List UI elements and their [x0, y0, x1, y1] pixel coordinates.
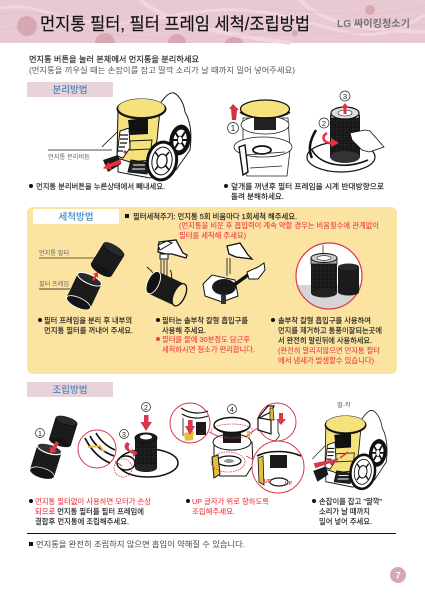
text: separate step two: 덮개를 꺼낸후 필터 프레임을 시계 반대방향으로: [231, 182, 384, 191]
text: cleaning step three: 서 완전히 말린뒤에 사용하세요.: [278, 336, 372, 345]
intro text: [29, 54, 295, 75]
text: assembly step three: 밀어 넣어 주세요.: [319, 517, 372, 526]
footer note: 먼지통을 완전히 조립하지 않으면 흡입이 약해질 수 있습니다.: [36, 539, 245, 549]
title: 먼지통 필터, 필터 프레임 세척/조립방법: [40, 14, 310, 34]
heading: assembly method: [27, 382, 113, 397]
text: cleaning step three: 솔부착 칼형 흡입구를 사용하여: [278, 316, 371, 325]
page number: 7: [395, 570, 401, 582]
illustration: filter twist removal: 3: [343, 92, 347, 101]
page number: [390, 567, 406, 583]
illustration: vacuum with dust bin release: [48, 93, 193, 182]
inset: lid tab detail: [170, 403, 220, 443]
panel: cleaning method: [27, 207, 397, 374]
illustration: dried filter inset: [296, 243, 362, 309]
inset: latch detail: [250, 403, 296, 441]
inset: UP mark detail: UP: [285, 481, 293, 487]
text: separate step one: 먼지통 분리버튼을 누른상태에서 빼내세요.: [36, 182, 165, 191]
illustration: lid removal: [228, 100, 292, 176]
header banner: [0, 0, 425, 43]
intro text: (먼지통을 끼우실 때는 손잡이를 잡고 딸깍 소리가 날 때까지 밀어 넣어주세요): [29, 65, 295, 75]
illustration: push dust bin into vacuum: [312, 402, 389, 491]
heading: assembly method: 조립방법: [53, 384, 87, 396]
text: assembly step three: 손잡이를 잡고 "딸깍": [319, 497, 382, 506]
text: cleaning interval: [125, 212, 379, 240]
text: cleaning step two: 세척하시면 청소가 편리합니다.: [162, 345, 255, 354]
heading: cleaning method: 세척방법: [59, 211, 93, 223]
text: cleaning step one: [38, 316, 133, 335]
text: cleaning step three: 먼지를 제거하고 통풍이잘되는곳에: [278, 326, 382, 335]
illustration: rinsing filter under faucet: [143, 240, 190, 308]
illustration: brushing filter with nozzle: [203, 243, 265, 304]
text: cleaning step two: 필터는 솔부착 칼형 흡입구를: [162, 316, 248, 325]
illustration: seat filter on base: 2: [144, 405, 148, 412]
illustration: insert filter into frame: 1: [38, 431, 42, 438]
text: cleaning step three: [271, 316, 382, 365]
illustration: vacuum with dust bin release: 먼지통 분리버튼: [48, 153, 90, 161]
heading: separation method: 분리방법: [53, 85, 87, 96]
illustration: insert filter into frame: [28, 414, 78, 482]
text: assembly step two: [186, 497, 269, 516]
text: assembly step three: [312, 497, 382, 526]
text: cleaning interval: 필터를 세척해 주세요): [179, 231, 246, 240]
illustration: filter and frame: [39, 240, 126, 313]
heading: cleaning method: [33, 209, 119, 224]
text: assembly step two: 조립해주세요.: [192, 507, 235, 516]
text: separate step two: 돌려 분해하세요.: [231, 192, 284, 201]
illustration: seat filter on base: [78, 402, 178, 477]
text: cleaning step three: (완전히 말리지않으면 먼지통 필터: [278, 346, 380, 355]
text: separate step two: [224, 182, 384, 201]
text: assembly step three: 소리가 날 때까지: [319, 507, 370, 516]
illustration: assemble lid on frame: [170, 403, 304, 493]
illustration: filter and frame: 필터 프레임: [39, 280, 69, 288]
intro text: 먼지통 버튼을 눌러 본체에서 먼지통을 분리하세요: [29, 54, 199, 64]
illustration: filter twist removal: 2: [322, 119, 326, 128]
heading: separation method: [27, 82, 113, 97]
text: assembly step one: 결합후 먼지통에 조립해주세요.: [35, 517, 129, 526]
text: cleaning interval: (먼지통을 비운 후 흡입력이 계속 약할 경우는 비움횟수에 관계없이: [179, 221, 379, 230]
text: cleaning interval: 필터세척주기: 먼지통 5회 비움마다 1회세척 해주세요.: [133, 212, 297, 221]
text: cleaning step one: 필터 프레임을 분리 후 내부의: [44, 316, 132, 325]
illustration: lid removal: 1: [231, 124, 236, 133]
illustration: filter and frame: 먼지통 필터: [39, 249, 69, 257]
brand label: LG 싸이킹청소기: [337, 17, 410, 30]
text: assembly step one: 먼지통 필터없이 사용하면 모터가 손상: [35, 497, 151, 506]
illustration: push dust bin into vacuum: 딸-칵: [337, 402, 351, 409]
text: assembly step two: UP 글자가 위로 향하도록: [192, 497, 269, 506]
text: cleaning step two: 사용해 주세요.: [162, 326, 206, 335]
illustration: seat filter on base: 3: [122, 432, 126, 439]
text: assembly step one: 되므로 먼지통 필터를 필터 프레임에: [35, 507, 144, 516]
illustration: assemble lid on frame: 4: [230, 407, 234, 414]
text: cleaning step two: [156, 316, 255, 354]
text: assembly step one: [29, 497, 151, 526]
text: cleaning step two: 필터를 물에 30분정도 담근후: [162, 335, 250, 344]
illustration: filter twist removal: [307, 91, 384, 172]
inset: UP mark detail: UP: [264, 479, 272, 485]
inset: UP mark detail: [246, 441, 304, 493]
text: cleaning step one: 먼지통 필터를 꺼내어 주세요.: [44, 326, 133, 335]
text: cleaning step three: 에서 냄새가 발생할수 있습니다): [278, 356, 374, 365]
